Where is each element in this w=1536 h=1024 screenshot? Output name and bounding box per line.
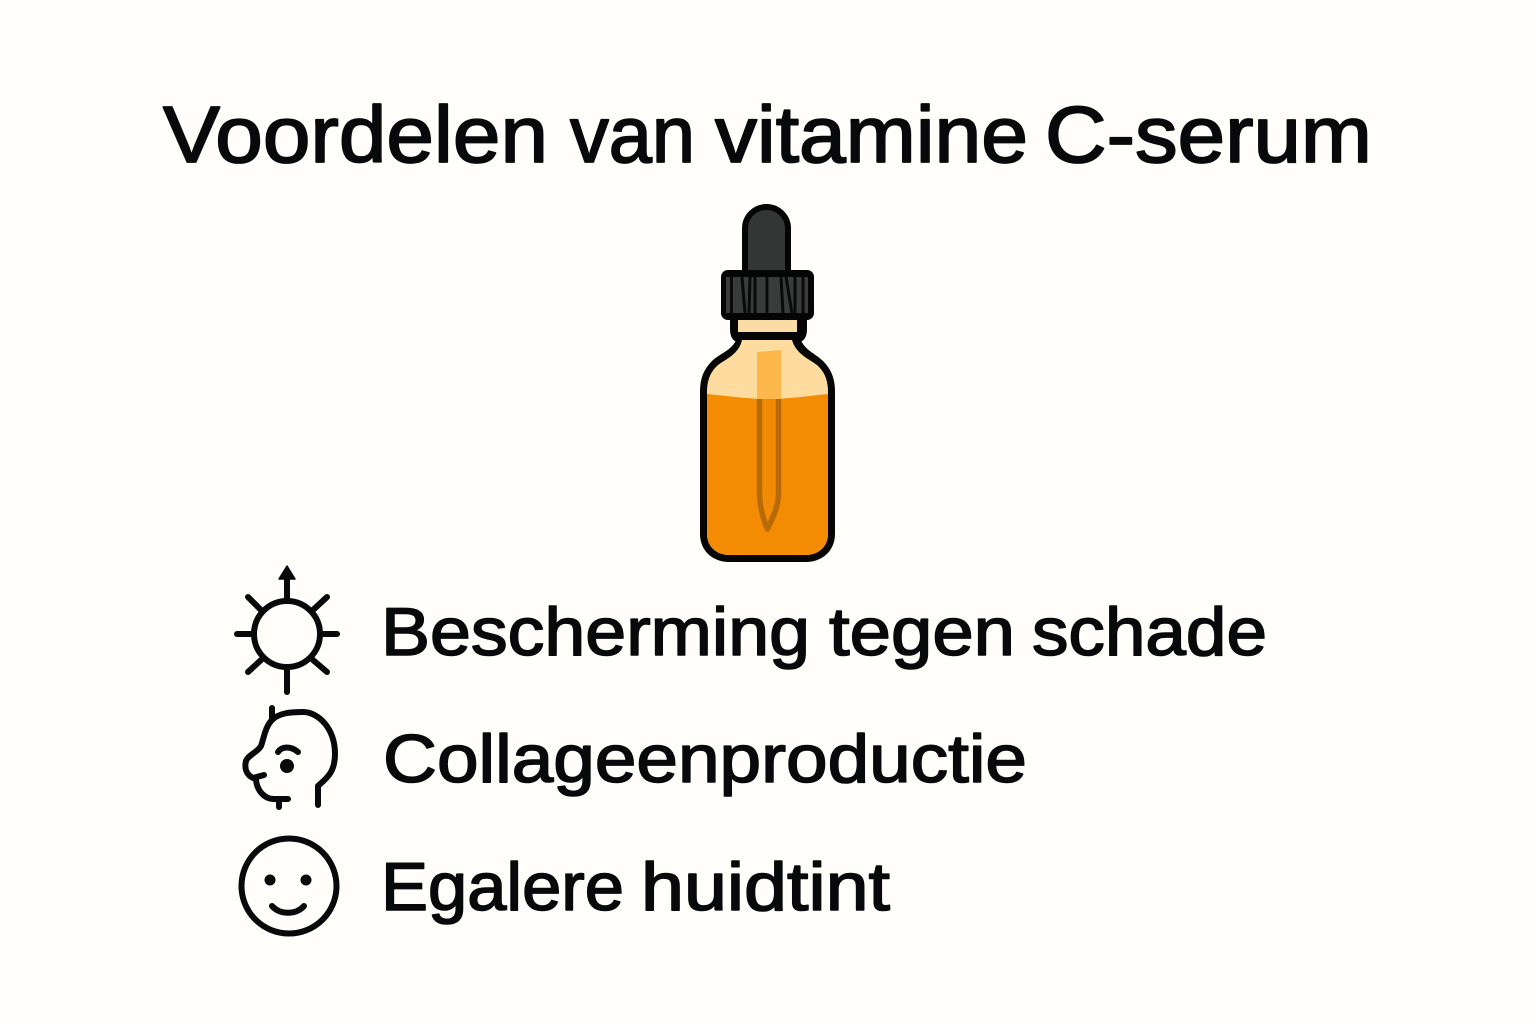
title: vitamine (715, 90, 1028, 179)
benefit text: protection (381, 594, 1267, 670)
title (163, 90, 1372, 179)
benefit text: collagen: Collageenproductie (383, 721, 1027, 797)
title: van (570, 90, 695, 179)
pipette inside liquid (760, 399, 778, 529)
benefit text: protection: Bescherming (381, 594, 810, 670)
serum liquid (707, 394, 828, 555)
ribbed collar (721, 270, 814, 320)
benefit text: even skin tone: Egalere (381, 849, 624, 925)
benefit text: even skin tone (381, 849, 890, 925)
title: Voordelen (163, 90, 548, 179)
icon: sun with upward arrow (237, 566, 337, 692)
benefit text: protection: schade (1032, 594, 1267, 670)
bottle neck (730, 316, 807, 342)
bottle body glass (707, 340, 828, 555)
icon: smiling face (242, 838, 336, 934)
title: C-serum (1045, 90, 1372, 179)
dropper bulb (745, 207, 788, 276)
neck interior (738, 320, 797, 332)
icon: face profile (245, 708, 335, 807)
icon: serum dropper bottle (700, 207, 835, 562)
bottle outline (700, 338, 835, 562)
benefit text: even skin tone: huidtint (641, 849, 890, 925)
pipette upper part (757, 350, 781, 399)
benefit text: protection: tegen (829, 594, 1015, 670)
